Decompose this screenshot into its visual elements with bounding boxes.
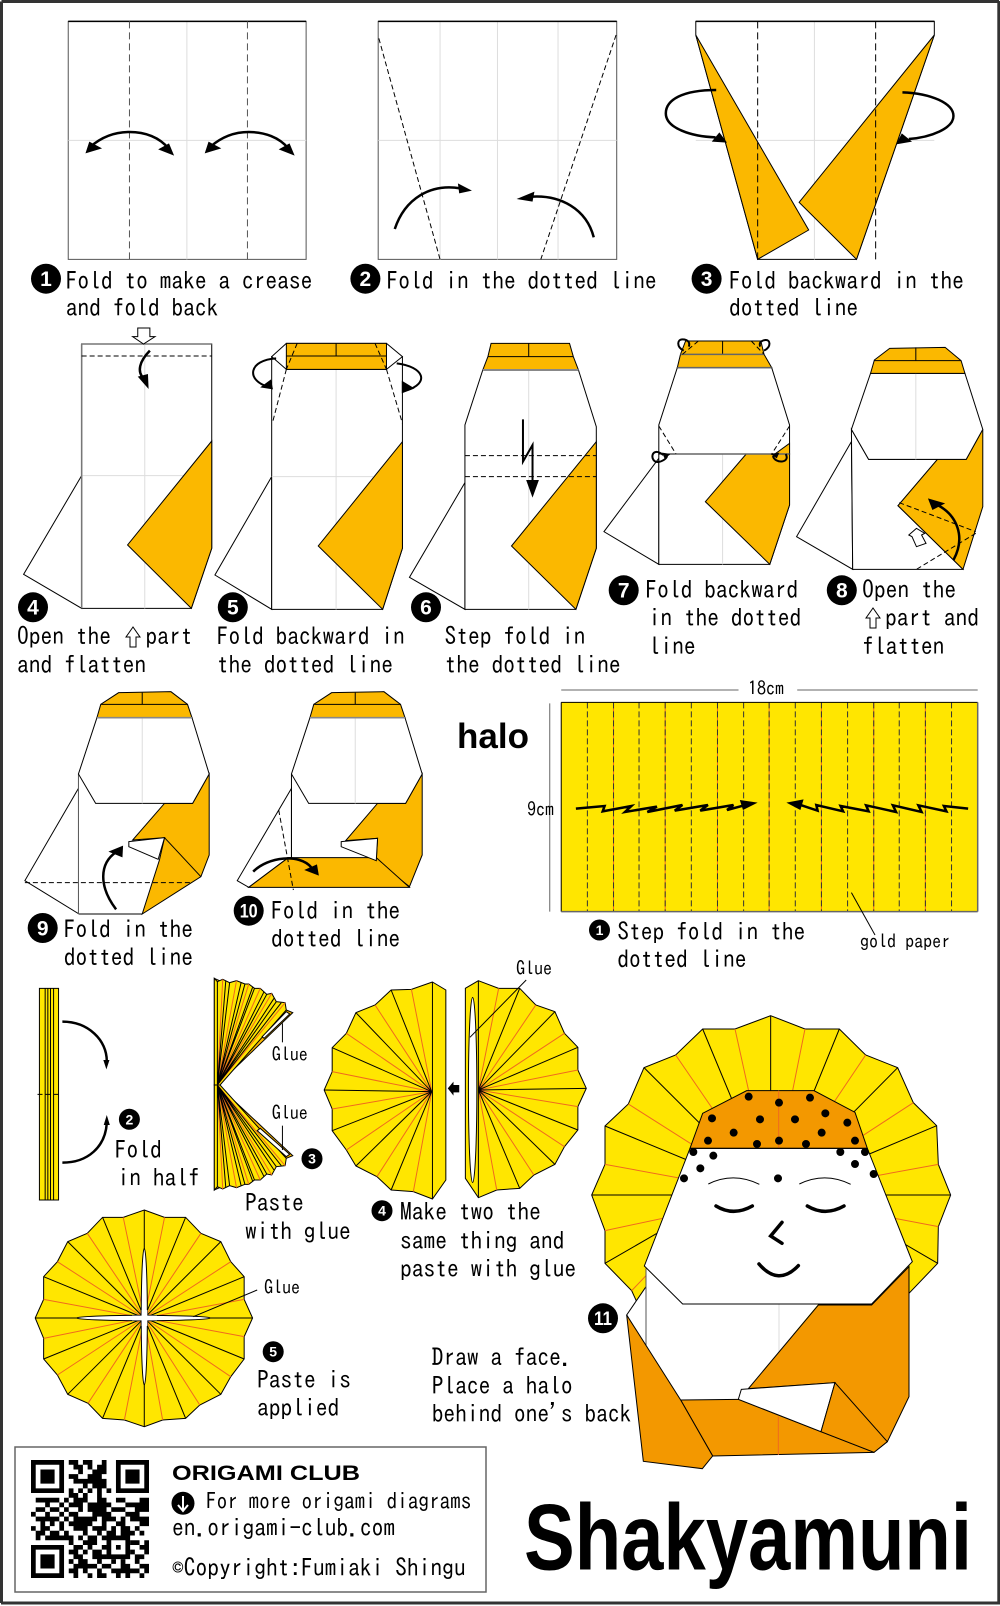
step number 3: 3 bbox=[701, 268, 712, 291]
caption: step 4: part bbox=[145, 623, 192, 648]
caption: step 4: and flatten bbox=[17, 652, 146, 676]
diagram: step 6 bbox=[409, 343, 596, 609]
label: glue: Glue bbox=[264, 1279, 300, 1297]
step number halo 2 bbox=[119, 1109, 140, 1130]
QR code bbox=[31, 1460, 149, 1578]
panel: step 4 bbox=[17, 328, 212, 676]
panel: footer credits bbox=[15, 1447, 486, 1592]
label: gold paper: gold paper bbox=[860, 933, 950, 951]
caption: step 3: dotted line bbox=[729, 295, 858, 320]
panel: step 6 bbox=[409, 343, 621, 676]
heading: halo: halo bbox=[457, 717, 529, 756]
panel: halo step 4 two halves bbox=[324, 960, 586, 1280]
caption: halo step 3: with glue bbox=[245, 1218, 351, 1243]
caption: step 2: Fold in the dotted line bbox=[386, 268, 657, 292]
panel: step 5 bbox=[215, 343, 421, 676]
label: glue bottom: Glue bbox=[272, 1104, 308, 1122]
diagram: step 7 bbox=[604, 339, 790, 564]
panel: step 7 bbox=[604, 339, 801, 658]
step number 10: 10 bbox=[240, 902, 258, 922]
step number 9: 9 bbox=[37, 917, 49, 940]
caption: halo step 1: dotted line bbox=[617, 946, 746, 971]
panel: step 10 bbox=[234, 692, 422, 950]
caption: step 5: the dotted line bbox=[217, 652, 393, 676]
step number 11 bbox=[588, 1303, 618, 1333]
caption: step 10: dotted line bbox=[271, 926, 400, 950]
caption: step 3: Fold backward in the bbox=[729, 268, 964, 292]
label: glue top: Glue bbox=[272, 1046, 308, 1064]
caption: step 8 bbox=[862, 577, 979, 658]
step number 4 bbox=[18, 592, 48, 622]
step number 9 bbox=[28, 913, 58, 943]
caption: step 9: dotted line bbox=[64, 944, 193, 969]
caption: step 9: Fold in the bbox=[64, 916, 193, 941]
diagram: step 1 square with creases bbox=[68, 21, 306, 259]
diagram: step 10 bbox=[237, 692, 422, 890]
hair bbox=[690, 1091, 867, 1148]
caption: step 10: Fold in the bbox=[271, 898, 400, 922]
panel: halo step 3 paste fan bbox=[214, 978, 351, 1243]
caption: halo step 2: in half bbox=[118, 1165, 200, 1190]
diagram: pleated gold paper bbox=[550, 690, 978, 935]
caption: step 1: Fold to make a crease bbox=[66, 268, 312, 292]
dimension: 18cm: 18cm bbox=[748, 680, 784, 698]
step number halo 5: 5 bbox=[269, 1344, 277, 1360]
caption: step 11: behind one's back bbox=[432, 1401, 631, 1426]
step number halo 5 bbox=[263, 1341, 284, 1362]
caption: halo step 4: same thing and bbox=[400, 1228, 564, 1252]
caption: step 4 bbox=[17, 623, 192, 676]
caption: step 6: Step fold in bbox=[444, 623, 585, 648]
diagram: full halo circle bbox=[35, 1210, 257, 1427]
step number 2: 2 bbox=[360, 268, 371, 291]
step number 2 bbox=[350, 264, 380, 294]
footer heading: ORIGAMI CLUB bbox=[172, 1462, 360, 1485]
diagram: step 3 folded triangles bbox=[666, 21, 953, 259]
caption: halo step 5: applied bbox=[257, 1395, 339, 1420]
dimension: 9cm: 9cm bbox=[527, 801, 554, 819]
diagram: step 4 bbox=[24, 328, 212, 608]
diagram: left half fan bbox=[324, 982, 446, 1199]
caption: halo step 1: Step fold in the bbox=[617, 919, 805, 944]
step number halo 4 bbox=[372, 1200, 392, 1221]
face bbox=[644, 1148, 912, 1304]
caption: step 1: and fold back bbox=[66, 295, 218, 320]
diagram: step 9 bbox=[25, 692, 209, 914]
step number halo 3 bbox=[302, 1148, 322, 1169]
icon: down arrow circle bbox=[172, 1492, 194, 1515]
footer copyright: ©Copyright:Fumiaki Shingu bbox=[172, 1555, 466, 1580]
step number halo 1 bbox=[589, 920, 610, 940]
panel: halo step 5 full circle bbox=[35, 1210, 351, 1427]
step number 5: 5 bbox=[227, 597, 239, 620]
step number halo 1: 1 bbox=[596, 922, 604, 938]
step number 6 bbox=[411, 592, 441, 622]
footer link text: For more origami diagrams bbox=[206, 1489, 471, 1512]
caption: step 11: Draw a face. bbox=[432, 1344, 573, 1369]
panel: step 3 bbox=[666, 21, 964, 320]
caption: step 11: Place a halo bbox=[432, 1373, 573, 1397]
panel: halo step 2 fold in half bbox=[38, 988, 200, 1200]
step number 7 bbox=[609, 575, 639, 605]
panel: halo step 1 gold paper bbox=[527, 680, 978, 971]
caption: step 7: line bbox=[649, 633, 696, 658]
caption: halo step 4: Make two the bbox=[400, 1199, 541, 1224]
step number 5 bbox=[218, 592, 248, 622]
step number 4: 4 bbox=[27, 597, 39, 620]
label: glue: Glue bbox=[516, 960, 552, 978]
step number 3 bbox=[692, 264, 722, 294]
halo behind figure bbox=[592, 1016, 951, 1333]
step number halo 2: 2 bbox=[126, 1111, 134, 1127]
step number 8: 8 bbox=[836, 580, 848, 603]
step number 11: 11 bbox=[594, 1309, 612, 1330]
footer url: en.origami-club.com bbox=[172, 1515, 395, 1540]
diagram: folded strip with arrows bbox=[38, 988, 110, 1200]
step number halo 4: 4 bbox=[378, 1203, 386, 1219]
caption: halo step 3: Paste bbox=[245, 1190, 304, 1215]
step number 10 bbox=[234, 896, 264, 926]
step number halo 3: 3 bbox=[308, 1151, 316, 1167]
step number 1: 1 bbox=[40, 268, 52, 291]
caption: step 8: part and bbox=[885, 605, 979, 630]
caption: step 8: Open the bbox=[862, 577, 956, 601]
caption: step 4: Open the bbox=[17, 623, 111, 648]
panel: step 11 finished figure bbox=[432, 1016, 951, 1469]
step number 7: 7 bbox=[618, 580, 630, 603]
caption: halo step 5: Paste is bbox=[257, 1367, 351, 1391]
panel: step 1 bbox=[31, 21, 312, 320]
caption: halo step 2: Fold bbox=[115, 1137, 162, 1161]
panel: step 9 bbox=[25, 692, 209, 969]
caption: step 7: in the dotted bbox=[649, 605, 801, 630]
panel: step 2 bbox=[350, 21, 657, 294]
caption: halo step 4: paste with glue bbox=[400, 1256, 576, 1280]
diagram: finished Shakyamuni with halo bbox=[592, 1016, 951, 1469]
diagram: step 8 bbox=[797, 347, 983, 569]
caption: step 5: Fold backward in bbox=[217, 623, 405, 648]
diagram: lower fan bbox=[214, 1085, 293, 1190]
body and robe bbox=[627, 1267, 909, 1469]
step number 8 bbox=[827, 575, 857, 605]
caption: step 6: the dotted line bbox=[444, 652, 621, 676]
panel: step 8 bbox=[797, 347, 983, 658]
step number 1 bbox=[31, 264, 61, 294]
diagram: upper fan bbox=[214, 978, 293, 1085]
diagram: step 5 bbox=[215, 343, 421, 609]
caption: step 7: Fold backward bbox=[645, 577, 798, 601]
step number 6: 6 bbox=[420, 597, 432, 620]
diagram: step 2 square with diagonal folds bbox=[378, 21, 617, 259]
diagram: right half fan with glue slit bbox=[448, 980, 586, 1198]
caption: step 8: flatten bbox=[862, 633, 944, 658]
